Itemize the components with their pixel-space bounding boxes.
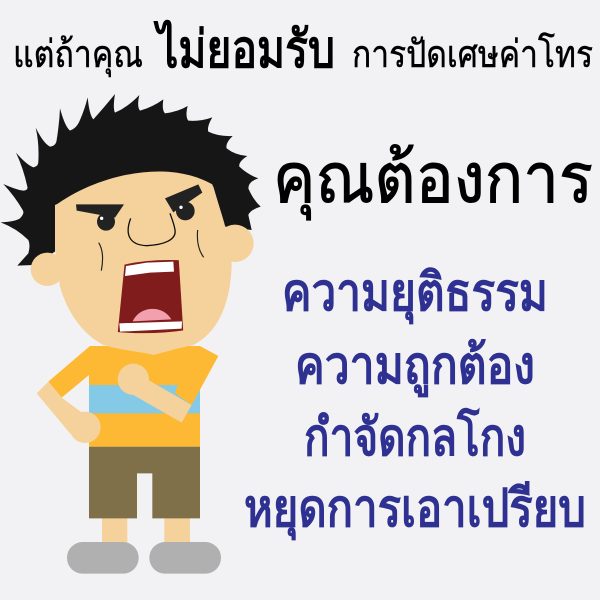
mouth	[118, 261, 183, 333]
shirt stripe	[89, 385, 200, 413]
list of demands: ความถูกต้อง	[295, 337, 535, 398]
heading line	[13, 20, 593, 79]
eyes	[97, 202, 195, 231]
illustration: angry man	[1, 94, 261, 574]
legs	[102, 517, 190, 544]
shirt	[48, 346, 200, 447]
heading line: แต่ถ้าคุณ	[13, 34, 143, 77]
list of demands	[244, 264, 586, 541]
teeth	[119, 262, 182, 332]
right arm	[118, 364, 192, 423]
shirt sleeve	[153, 346, 218, 405]
hair	[1, 94, 261, 266]
shoes	[67, 542, 221, 574]
body	[37, 346, 221, 574]
wrinkles	[99, 230, 204, 271]
left arm	[37, 382, 101, 443]
nose	[128, 213, 175, 246]
heading line: ไม่ยอมรับ	[154, 20, 335, 79]
face	[55, 171, 232, 355]
list of demands: ความยุติธรรม	[282, 264, 548, 325]
eyebrows	[76, 184, 202, 218]
shorts	[89, 447, 200, 518]
list of demands: กำจัดกลโกง	[304, 406, 526, 467]
tongue	[133, 309, 171, 321]
ears	[31, 225, 254, 286]
head	[1, 94, 261, 355]
